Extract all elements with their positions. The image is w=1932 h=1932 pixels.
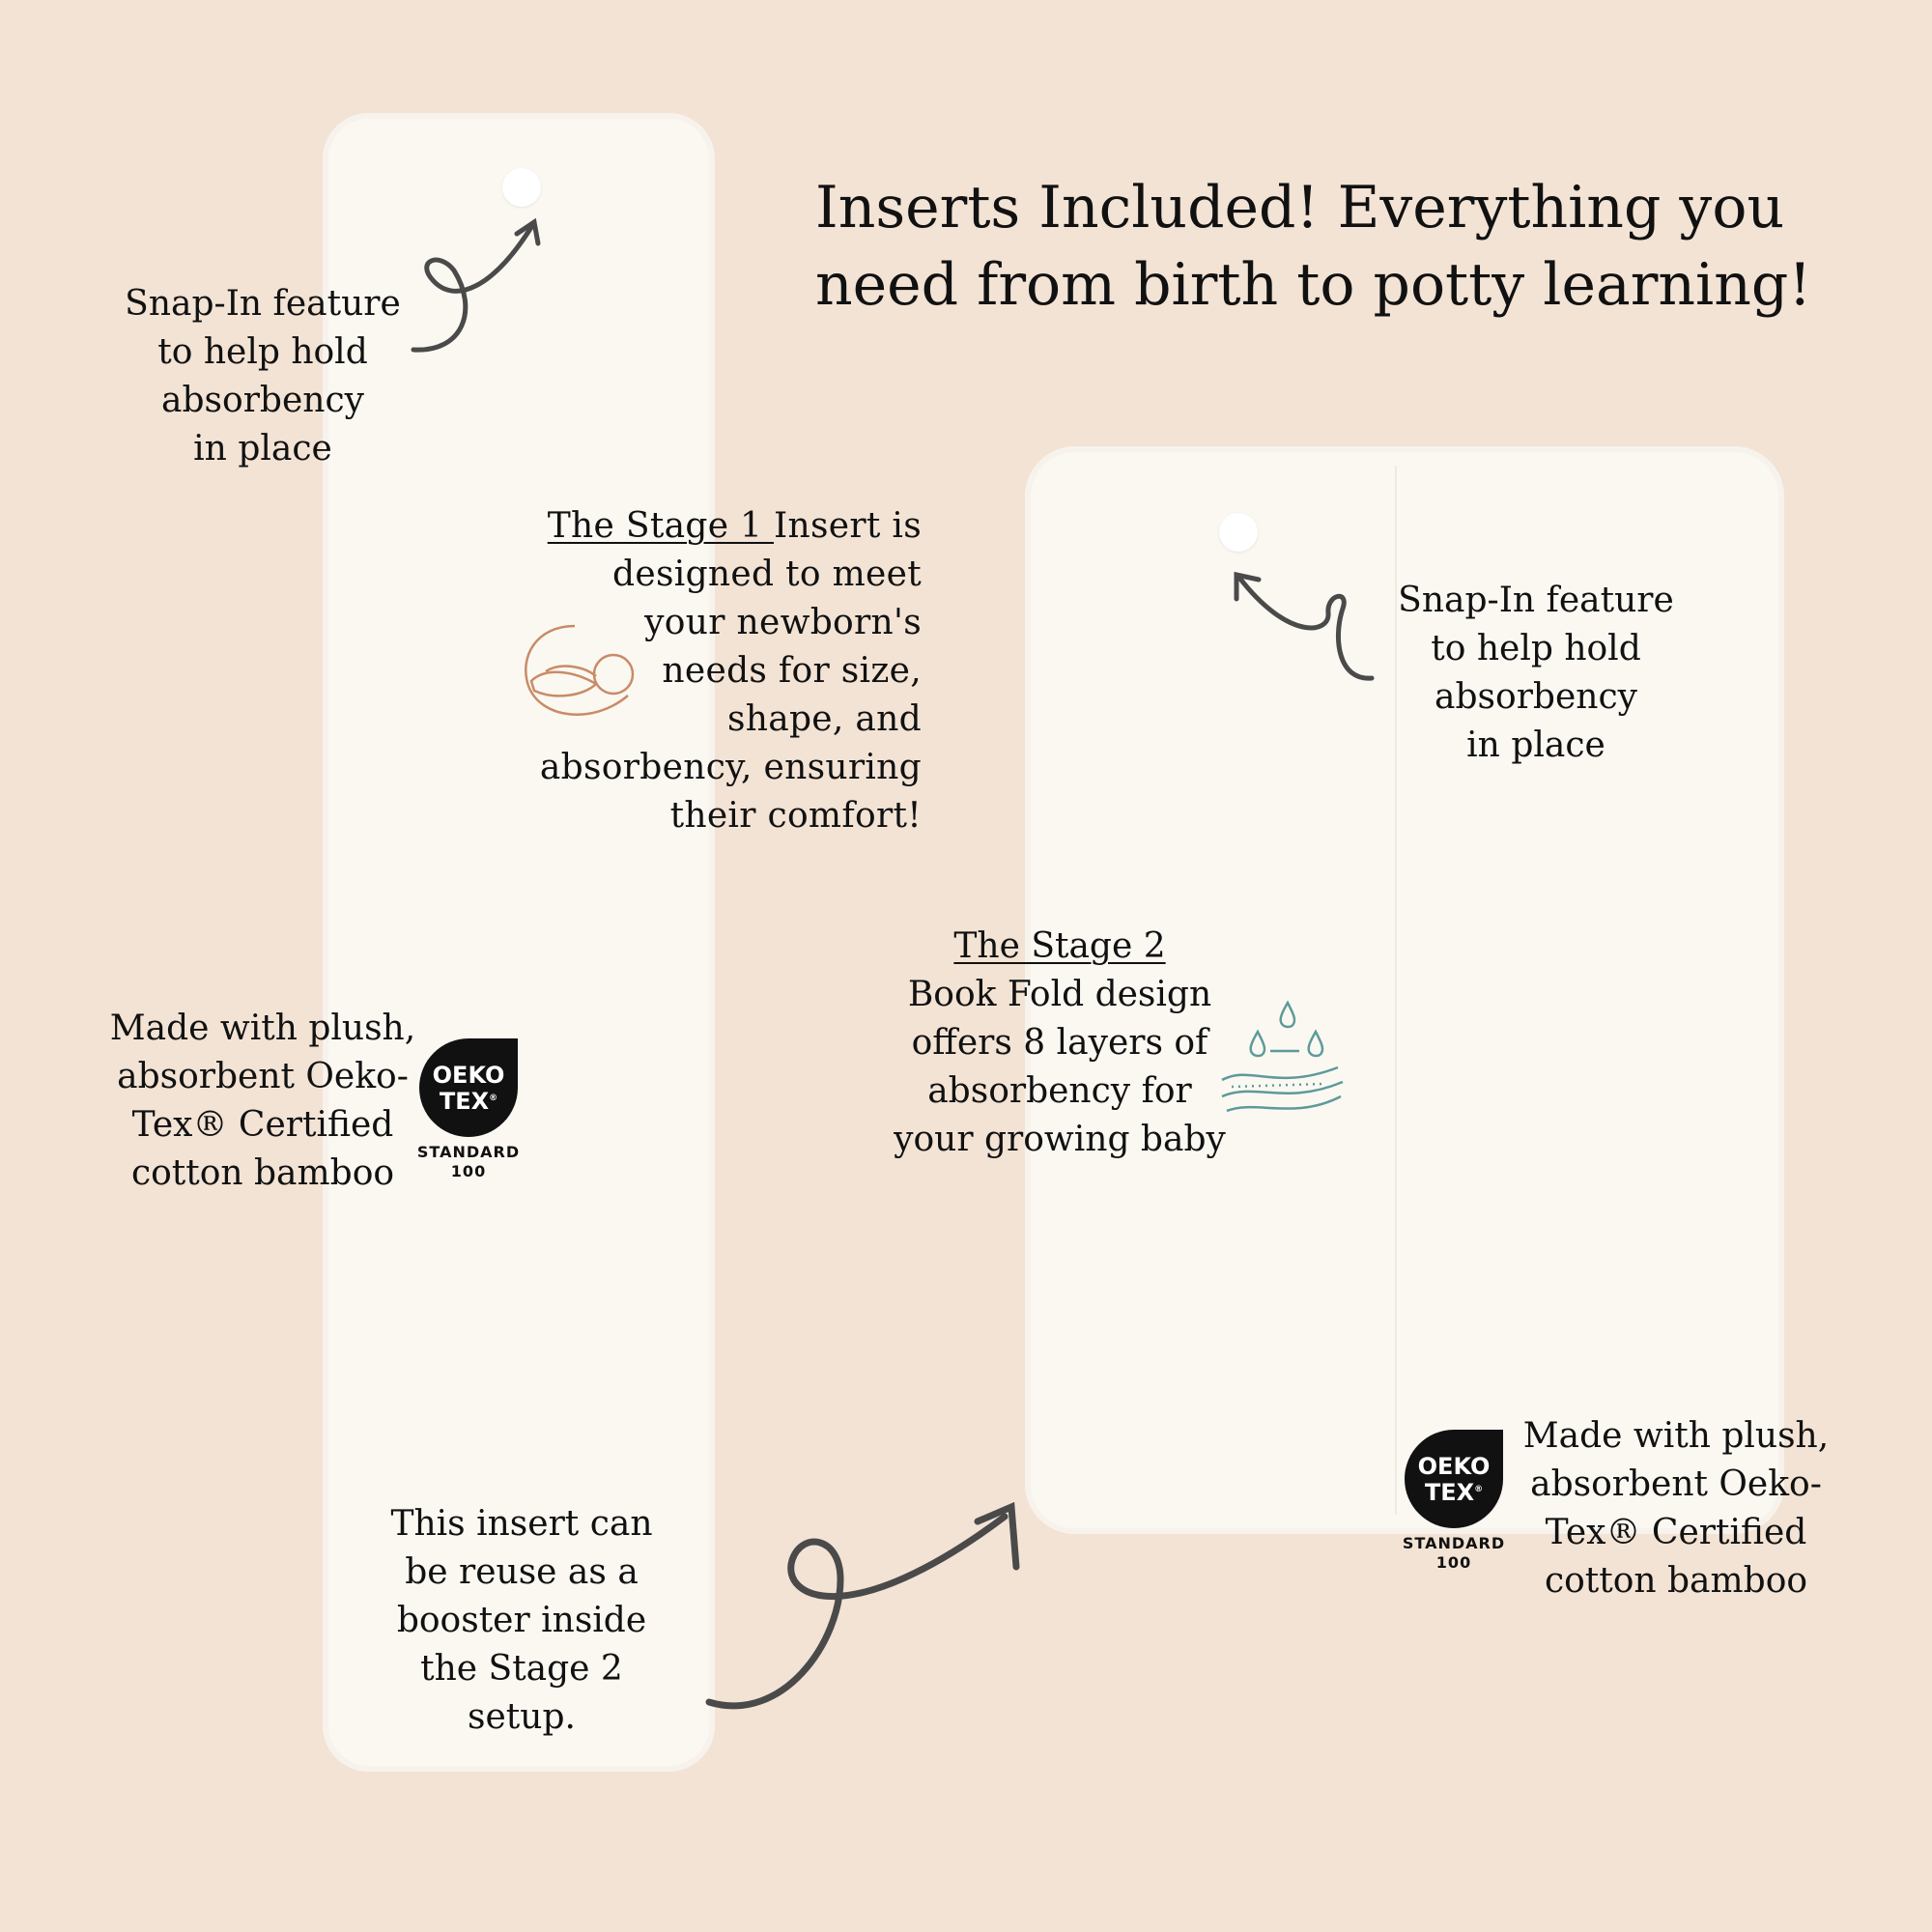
- text: snap-in left: to help hold: [157, 332, 368, 372]
- text: oeko left: Made with plush,: [110, 1009, 415, 1048]
- text: snap-in left: Snap-In feature: [125, 284, 401, 324]
- text: oeko left: absorbent Oeko-: [117, 1057, 409, 1096]
- text: oeko right: cotton bamboo: [1545, 1561, 1807, 1601]
- logo: oeko-tex right: [1403, 1430, 1505, 1572]
- text: stage 2: your growing baby: [894, 1120, 1226, 1159]
- logo: oeko-tex right: OEKO: [1418, 1453, 1490, 1480]
- text: oeko right: [1523, 1416, 1829, 1601]
- text: snap-in left: in place: [193, 429, 332, 469]
- icon: water layers: [1221, 1001, 1343, 1113]
- text: stage 2: Book Fold design: [908, 975, 1211, 1014]
- text: snap-in right: absorbency: [1435, 677, 1637, 717]
- text: booster: [390, 1504, 653, 1737]
- text: snap-in left: absorbency: [161, 381, 364, 420]
- text: oeko right: absorbent Oeko-: [1530, 1464, 1822, 1504]
- title: Inserts Included! Everything you: [815, 174, 1784, 242]
- text: oeko left: [110, 1009, 415, 1193]
- text: stage 1: their comfort!: [670, 796, 922, 836]
- text: stage 1: absorbency, ensuring: [540, 748, 922, 787]
- text: booster: booster inside: [397, 1601, 646, 1640]
- text: stage 1: shape, and: [727, 699, 922, 739]
- text: oeko right: Made with plush,: [1523, 1416, 1829, 1456]
- text: snap-in right: [1398, 581, 1674, 765]
- logo: oeko-tex left: 100: [451, 1162, 486, 1180]
- logo: oeko-tex left: [417, 1038, 520, 1180]
- title: need from birth to potty learning!: [815, 251, 1811, 319]
- logo: oeko-tex left: STANDARD: [417, 1143, 520, 1161]
- text: stage 2: [894, 926, 1226, 1159]
- text: booster: setup.: [468, 1697, 576, 1737]
- title: [815, 174, 1811, 319]
- text: stage 1: The Stage 1 Insert is: [548, 506, 922, 546]
- text: booster: This insert can: [390, 1504, 653, 1544]
- icon: snap left: [502, 168, 541, 207]
- text: stage 1: needs for size,: [662, 651, 922, 691]
- text: snap-in left: [125, 284, 401, 469]
- text: snap-in right: Snap-In feature: [1398, 581, 1674, 620]
- arrow: snap right: [1235, 572, 1374, 681]
- logo: oeko-tex right: STANDARD: [1403, 1534, 1505, 1552]
- arrow: snap left: [412, 218, 541, 353]
- text: snap-in right: to help hold: [1431, 629, 1641, 668]
- text: stage 1: designed to meet: [612, 554, 922, 594]
- insert: stage 1: [323, 113, 715, 1772]
- icon: snap right: [1219, 513, 1258, 552]
- text: stage 1: [540, 506, 922, 836]
- text: oeko left: cotton bamboo: [131, 1153, 394, 1193]
- text: stage 1: your newborn's: [644, 603, 922, 642]
- logo: oeko-tex right: 100: [1436, 1553, 1471, 1572]
- insert: stage 2: [1025, 446, 1784, 1534]
- text: snap-in right: in place: [1466, 725, 1605, 765]
- text: stage 2: absorbency for: [927, 1071, 1192, 1111]
- logo: oeko-tex left: OEKO: [433, 1061, 504, 1088]
- text: stage 2: The Stage 2: [953, 926, 1166, 966]
- text: booster: the Stage 2: [420, 1649, 623, 1689]
- icon: baby: [525, 624, 634, 716]
- logo: oeko-tex right: TEX®: [1425, 1478, 1483, 1505]
- text: booster: be reuse as a: [405, 1552, 639, 1592]
- text: oeko left: Tex® Certified: [132, 1105, 393, 1145]
- text: oeko right: Tex® Certified: [1546, 1513, 1806, 1552]
- text: stage 2: offers 8 layers of: [912, 1023, 1208, 1063]
- arrow: big: [705, 1501, 1020, 1710]
- logo: oeko-tex left: TEX®: [440, 1088, 497, 1115]
